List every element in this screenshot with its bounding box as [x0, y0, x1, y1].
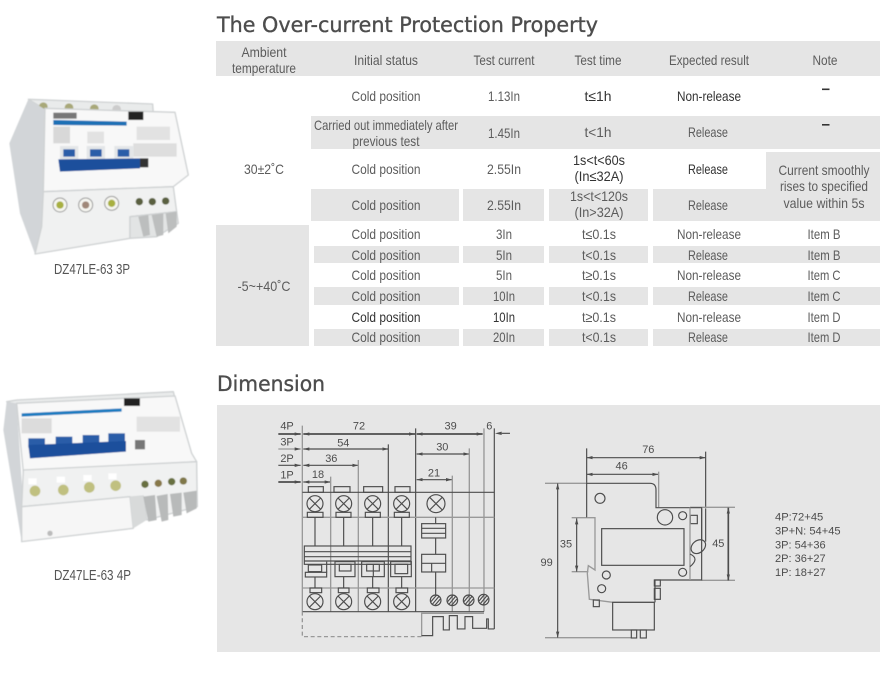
table rows: 30±2°C: 2.55In — [487, 197, 521, 213]
table header: temperature — [232, 60, 296, 76]
top and bottom terminals — [307, 487, 445, 610]
table rows: -5~+40°C: t<0.1s — [582, 247, 616, 263]
dimension values: 35 — [560, 539, 572, 551]
table rows: -5~+40°C: Item B — [808, 226, 840, 242]
dimension values — [541, 444, 724, 569]
table rows: 30±2°C: Release — [688, 197, 728, 213]
table header: Test current — [474, 52, 535, 68]
table rows: -5~+40°C: 10In — [493, 288, 515, 304]
width values: 30 — [436, 441, 448, 453]
table header: Ambient — [242, 44, 287, 60]
module extension lines — [302, 426, 494, 629]
table rows: 30±2°C: previous test — [352, 133, 420, 149]
caption: DZ47LE-63 3P: DZ47LE-63 3P — [54, 262, 130, 278]
table rows: 30±2°C: 1s<t<60s — [573, 152, 625, 168]
dimension values: 45 — [712, 538, 724, 550]
diagram: side view dimensions — [541, 444, 841, 638]
table rows: -5~+40°C: Cold position — [352, 329, 420, 345]
dimension values: 76 — [642, 444, 654, 456]
table header: Expected result — [669, 52, 749, 68]
table rows: -5~+40°C: Item B — [808, 247, 840, 263]
width values: 54 — [337, 437, 349, 449]
table row shading — [216, 41, 880, 346]
table rows: 30±2°C: Cold position — [352, 197, 420, 213]
size list: 1P: 18+27 — [775, 567, 826, 579]
pole labels: 1P — [280, 470, 294, 482]
table rows: -5~+40°C: Item D — [808, 309, 840, 325]
diagram: front view dimensions — [278, 420, 510, 637]
dimension values: 99 — [541, 557, 553, 569]
size list: 2P: 36+27 — [775, 553, 826, 565]
table rows: -5~+40°C: 3In — [496, 226, 512, 242]
width values: 39 — [445, 421, 457, 433]
table rows: 30±2°C: 1.13In — [488, 88, 520, 104]
product image: DZ47LE-63 3P breaker — [9, 99, 188, 254]
table rows: -5~+40°C: Item C — [808, 288, 840, 304]
table rows: -5~+40°C: t<0.1s — [582, 329, 616, 345]
table rows: 30±2°C: t<1h — [584, 124, 612, 140]
table rows: -5~+40°C: t<0.1s — [582, 288, 616, 304]
table rows: -5~+40°C: 5In — [496, 267, 512, 283]
pole labels: 3P — [280, 437, 294, 449]
table rows: -5~+40°C: Item C — [808, 267, 840, 283]
table rows: -5~+40°C: Cold position — [352, 288, 420, 304]
table rows: -5~+40°C: Cold position — [352, 309, 420, 325]
table rows: 30±2°C: Cold position — [352, 161, 420, 177]
table rows: 30±2°C: value within 5s — [784, 195, 864, 211]
table rows: -5~+40°C — [352, 226, 840, 345]
table rows: 30±2°C: Carried out immediately after — [314, 117, 458, 133]
table rows: -5~+40°C: t≥0.1s — [582, 309, 616, 325]
dimension arrows — [545, 448, 735, 638]
size list: 3P+N: 54+45 — [775, 525, 841, 537]
table rows: 30±2°C: Cold position — [352, 88, 420, 104]
ambient temperature values: 30±2˚C — [244, 161, 284, 177]
size list — [775, 512, 841, 579]
table rows: -5~+40°C: 20In — [493, 329, 515, 345]
table rows: -5~+40°C: Non-release — [677, 309, 741, 325]
table rows: -5~+40°C: Cold position — [352, 267, 420, 283]
table rows: -5~+40°C: 10In — [493, 309, 515, 325]
table rows: -5~+40°C: t≤0.1s — [582, 226, 616, 242]
table header — [232, 44, 838, 76]
table rows: -5~+40°C: Non-release — [677, 226, 741, 242]
table rows: 30±2°C: (In≤32A) — [574, 168, 624, 184]
table rows: -5~+40°C: t≥0.1s — [582, 267, 616, 283]
breaker side profile — [587, 483, 708, 638]
table rows: -5~+40°C: Item D — [808, 329, 840, 345]
table rows: 30±2°C: 1s<t<120s — [570, 188, 628, 204]
table rows: 30±2°C: (In>32A) — [574, 204, 624, 220]
table rows: 30±2°C: 1.45In — [488, 125, 520, 141]
table rows: -5~+40°C: Non-release — [677, 267, 741, 283]
width values: 18 — [312, 469, 324, 481]
table rows: -5~+40°C: Release — [688, 329, 728, 345]
pole labels: 4P — [280, 420, 294, 432]
bottom terminal prongs — [302, 612, 494, 637]
table rows: 30±2°C — [314, 88, 870, 220]
table header: Note — [812, 52, 838, 68]
table rows: 30±2°C: Non-release — [677, 88, 741, 104]
dimension values: 46 — [616, 461, 628, 473]
width values: 21 — [428, 467, 440, 479]
table rows: -5~+40°C: 5In — [496, 247, 512, 263]
caption: DZ47LE-63 4P: DZ47LE-63 4P — [54, 568, 131, 584]
size list: 3P: 54+36 — [775, 539, 826, 551]
table header: Initial status — [354, 52, 418, 68]
table rows: -5~+40°C: Cold position — [352, 226, 420, 242]
table rows: 30±2°C: Release — [688, 161, 728, 177]
table rows: -5~+40°C: Release — [688, 288, 728, 304]
heading: over-current protection property: The Over-current Protection Property — [216, 13, 598, 37]
width values — [312, 421, 492, 481]
table rows: 30±2°C: t≤1h — [584, 88, 612, 104]
switching mechanism — [304, 517, 411, 588]
size list: 4P:72+45 — [775, 512, 823, 524]
product image: DZ47LE-63 4P breaker — [3, 392, 197, 542]
dimension arrows — [278, 432, 510, 482]
table: over-current protection property — [216, 41, 880, 346]
table rows: -5~+40°C: Release — [688, 247, 728, 263]
ambient temperature values: -5~+40˚C — [238, 278, 290, 294]
ambient temperature values — [238, 161, 290, 294]
width values: 36 — [325, 453, 337, 465]
table rows: 30±2°C: 2.55In — [487, 161, 521, 177]
heading: dimension: Dimension — [217, 372, 325, 396]
table rows: -5~+40°C: Cold position — [352, 247, 420, 263]
pole labels — [280, 420, 294, 482]
leakage module — [422, 517, 489, 606]
width values: 6 — [486, 421, 492, 433]
pole labels: 2P — [280, 453, 294, 465]
panel: dimension background — [217, 405, 880, 652]
width values: 72 — [353, 421, 365, 433]
table header: Test time — [574, 52, 622, 68]
table rows: 30±2°C: Release — [688, 124, 728, 140]
